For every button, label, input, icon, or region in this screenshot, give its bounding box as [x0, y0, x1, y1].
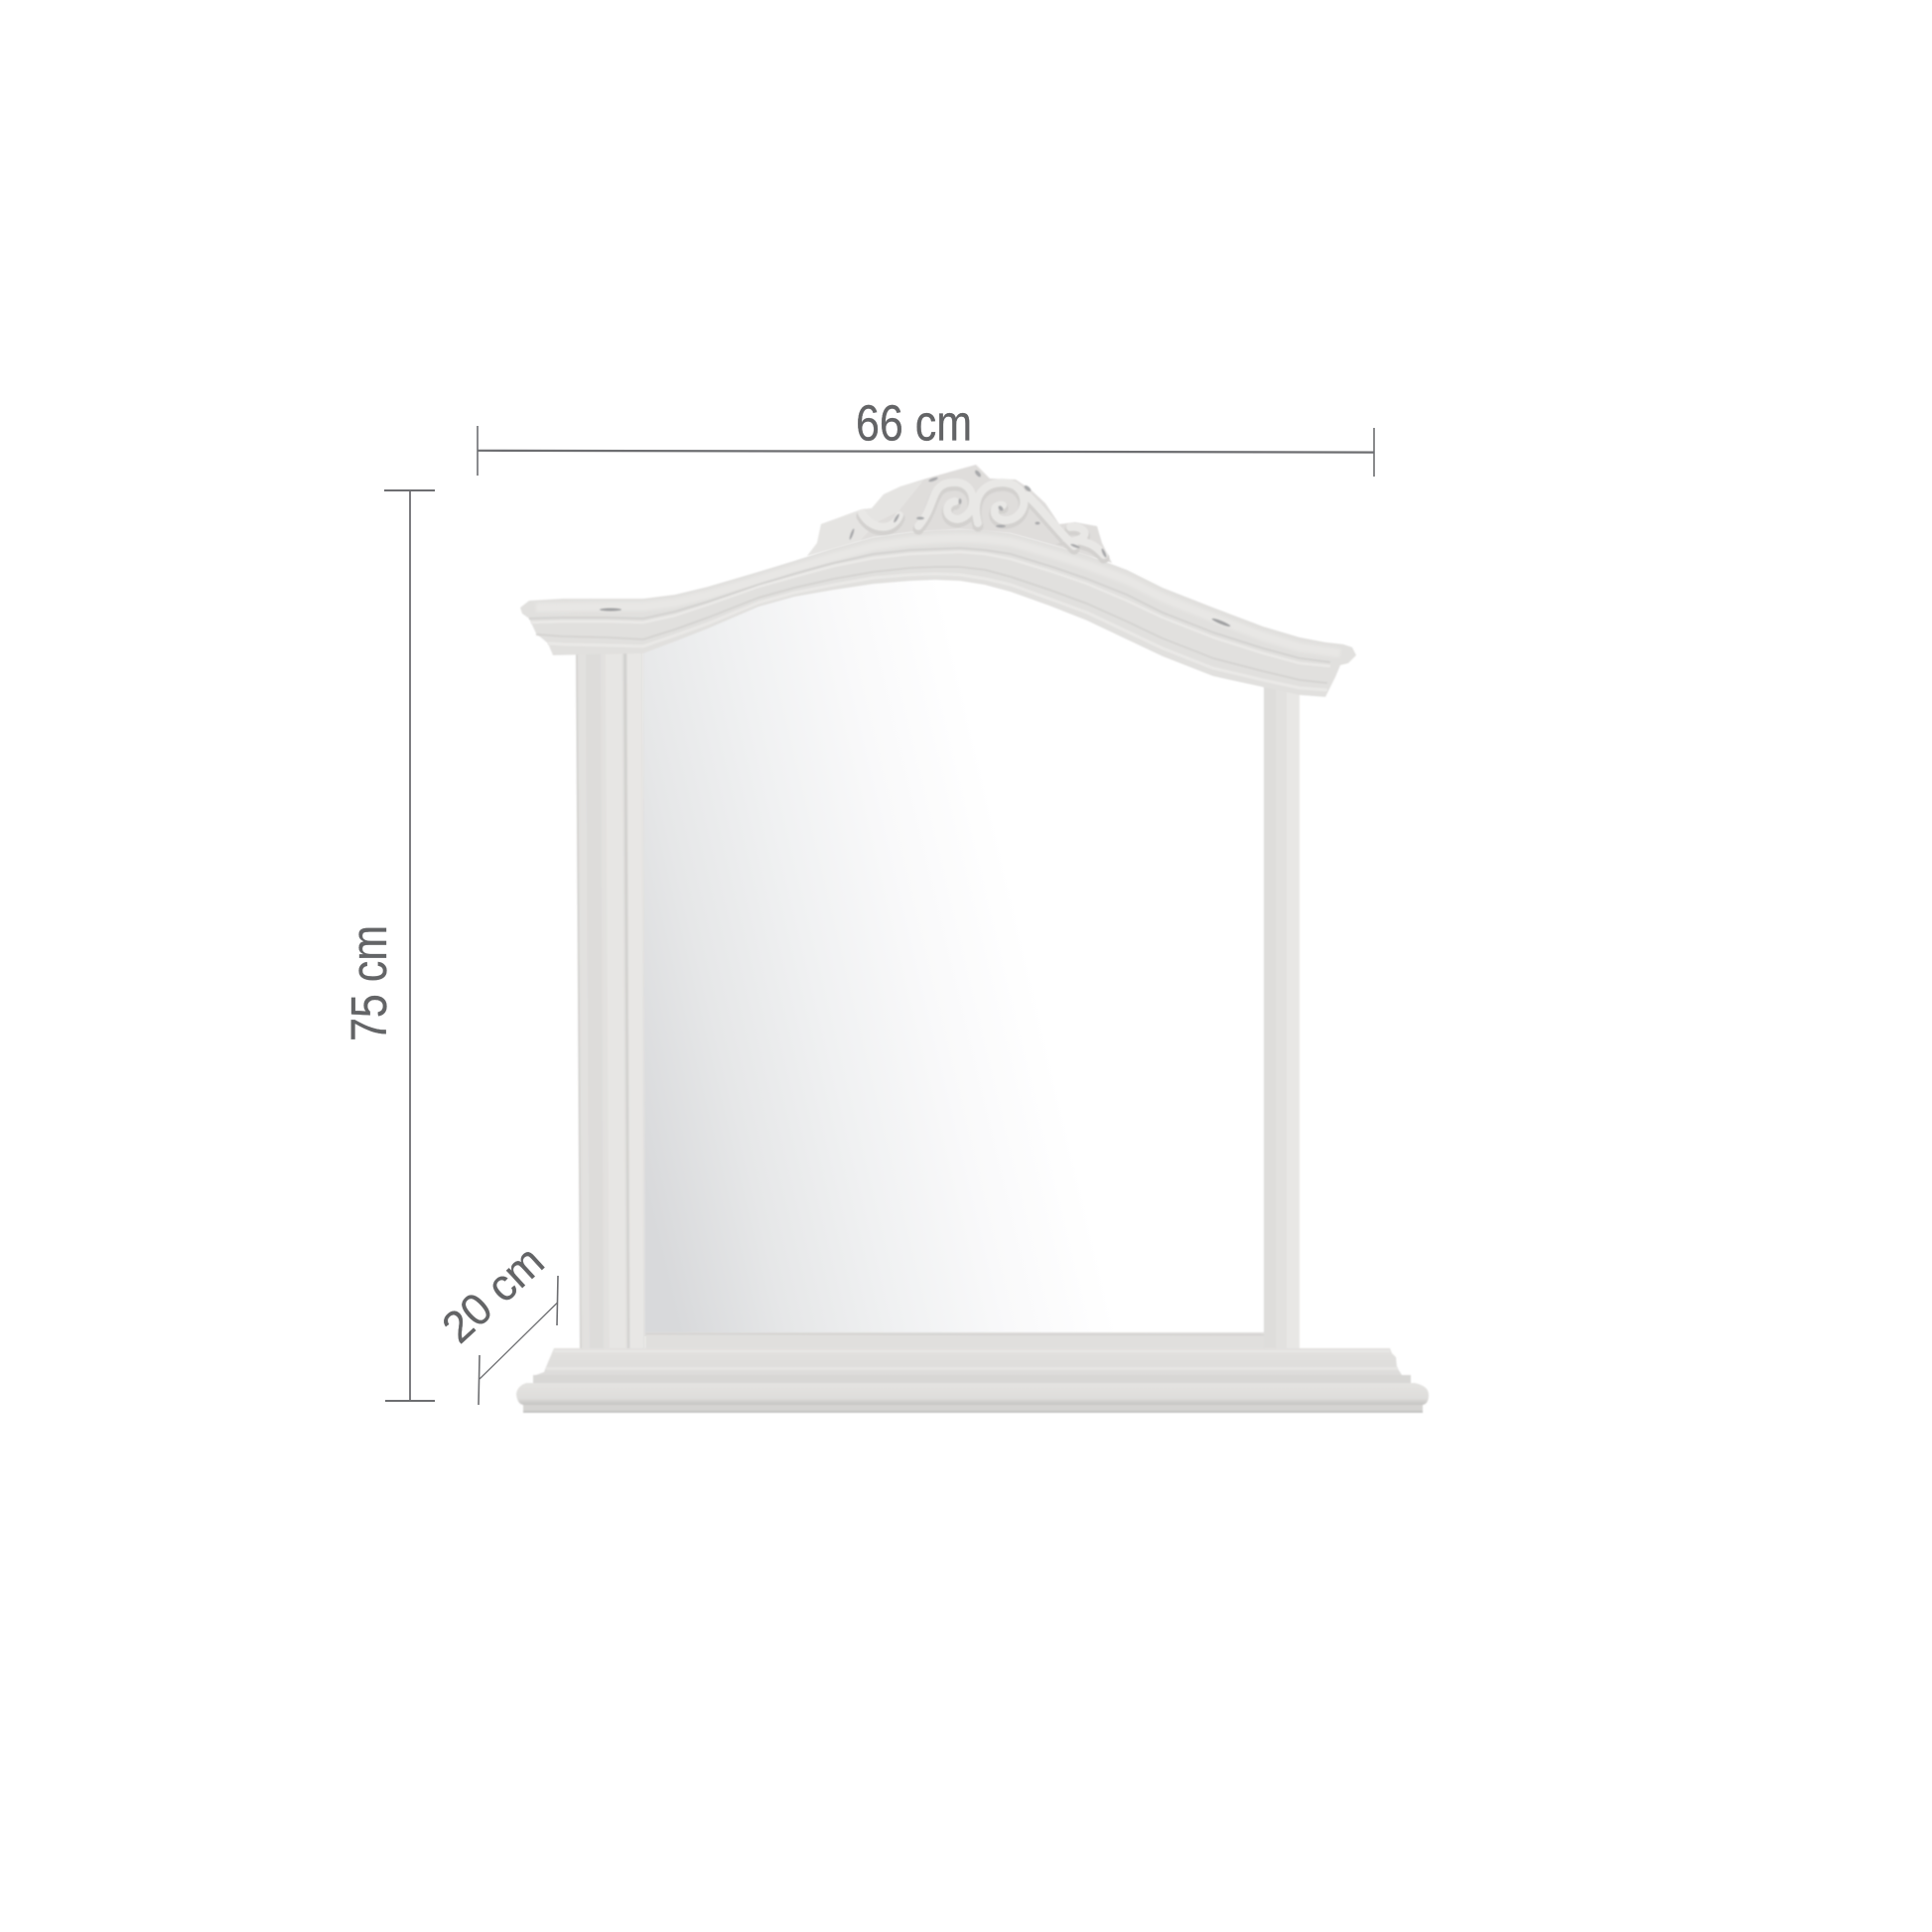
width label: 66 cm [856, 395, 972, 451]
right post [1264, 683, 1300, 1350]
cornice body [520, 529, 1356, 697]
arched cornice [520, 529, 1356, 697]
mirror glass [643, 573, 1271, 1336]
crest left plain block [807, 481, 923, 556]
width dimension line [478, 426, 1374, 477]
shelf foot [523, 1405, 1423, 1413]
height label: 75 cm [341, 925, 397, 1041]
depth dimension: 20 cm [432, 1235, 558, 1405]
shelf middle band [533, 1375, 1411, 1383]
depth dimension line [479, 1276, 558, 1405]
shelf upper step [533, 1348, 1411, 1383]
bottom rail of the frame [645, 1332, 1267, 1350]
depth label: 20 cm [432, 1235, 553, 1352]
cornice chip marks [600, 608, 1231, 627]
height dimension line [384, 490, 435, 1401]
shelf rounded lip [516, 1383, 1429, 1405]
mirror [516, 465, 1429, 1413]
cornice moulding lines [529, 548, 1330, 690]
carved crest [807, 465, 1112, 563]
stepped base shelf [516, 1348, 1429, 1413]
cornice top roll highlight [536, 538, 1340, 653]
crest scroll carving [862, 483, 1104, 558]
crest chip marks [849, 470, 1107, 558]
left post [577, 650, 645, 1350]
crest body [807, 465, 1112, 563]
